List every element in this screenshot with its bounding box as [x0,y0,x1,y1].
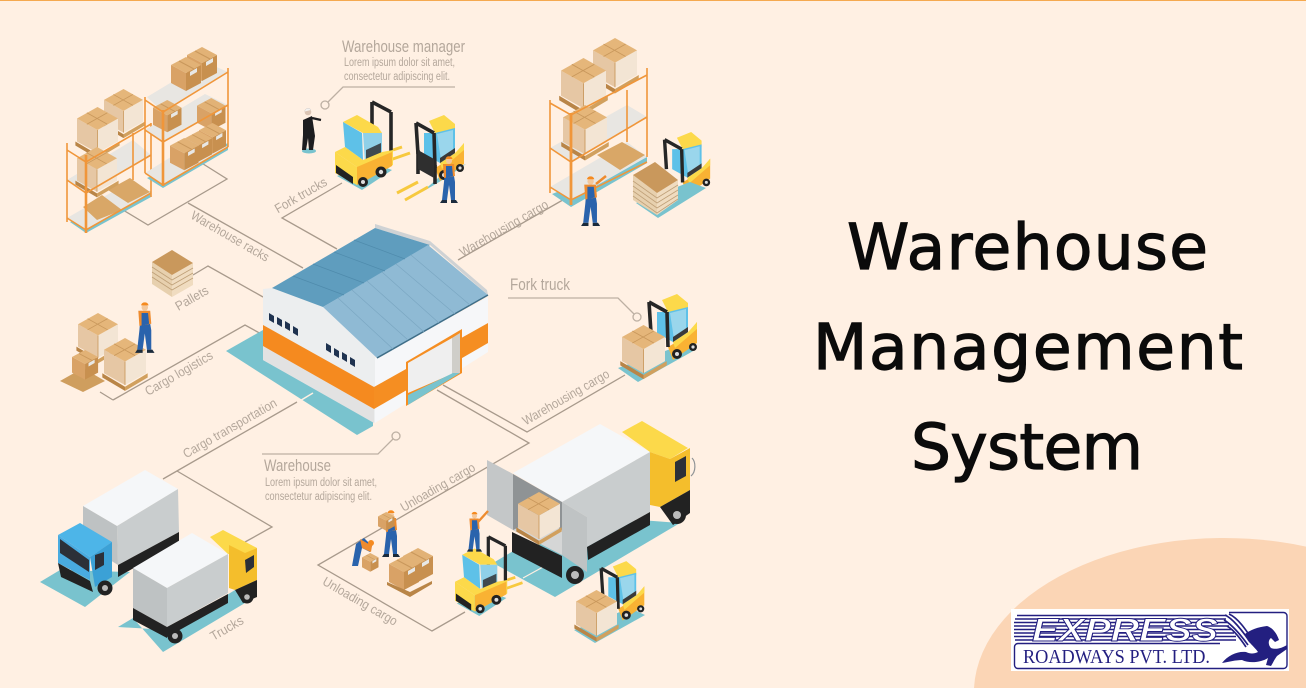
label: cargo transportation: Cargo transportation [180,395,279,461]
left rack [67,89,151,233]
worker pointing [581,176,600,226]
callout line: warehouse [262,432,400,454]
connector lines [100,162,625,631]
right rack [145,47,228,188]
blue truck [40,470,179,607]
top accent line [0,0,1306,1]
top-right rack with worker, pallet stack and forklift [550,38,710,226]
text: warehouse: consectetur adipiscing elit. [265,491,372,503]
label: trucks: Trucks [207,612,246,644]
text: warehouse: Lorem ipsum dolor sit amet, [265,477,377,489]
yellow truck [118,530,257,652]
text: fork truck: Fork truck [510,275,570,294]
label: pallets: Pallets [172,282,211,314]
callout line: warehouse manager [321,87,455,109]
cargo logistics group [60,302,155,392]
title: Warehouse [847,211,1208,284]
big unloading truck [487,421,695,597]
title: Management [813,311,1243,384]
label: unloading cargo lower: Unloading cargo [320,574,400,629]
callout line: fork truck [508,298,641,321]
text: warehouse [264,456,377,503]
label: fork trucks: Fork trucks [272,174,330,216]
logo: Express Roadways: EXPRESS [1032,612,1219,648]
text: warehouse manager: Warehouse manager [342,37,465,56]
forklift with crate right [618,294,697,382]
text: warehouse manager: Lorem ipsum dolor sit amet, [344,57,455,69]
unloading workers and boxes [352,510,433,597]
forklift 1 [335,102,410,190]
warehouse building [226,224,488,435]
text: warehouse: Warehouse [264,456,331,475]
title: System [911,411,1143,484]
logo: Express Roadways: ROADWAYS PVT. LTD. [1023,646,1210,668]
text: warehouse manager [342,37,465,83]
pallet stack small [152,250,193,297]
text: warehouse manager: consectetur adipiscing elit. [344,71,450,83]
logo: Express Roadways [1011,609,1289,671]
warehouse manager figure [302,108,321,154]
label: unloading cargo upper: Unloading cargo [398,460,478,515]
forklift with crate lower right [574,561,645,643]
label: warehouse racks: Warehouse racks [188,208,272,265]
label: warehousing cargo right: Warehousing cargo [520,366,612,428]
pallet stack [633,162,706,218]
icon: pegasus [1222,614,1287,666]
forklift behind stack [665,132,710,195]
title [813,211,1243,484]
corner blob [974,538,1306,688]
label: warehousing cargo top: Warehousing cargo [457,197,551,260]
forklift 2 with worker [397,115,466,203]
label: cargo logistics: Cargo logistics [142,347,216,399]
forklift with worker under truck [455,511,522,616]
